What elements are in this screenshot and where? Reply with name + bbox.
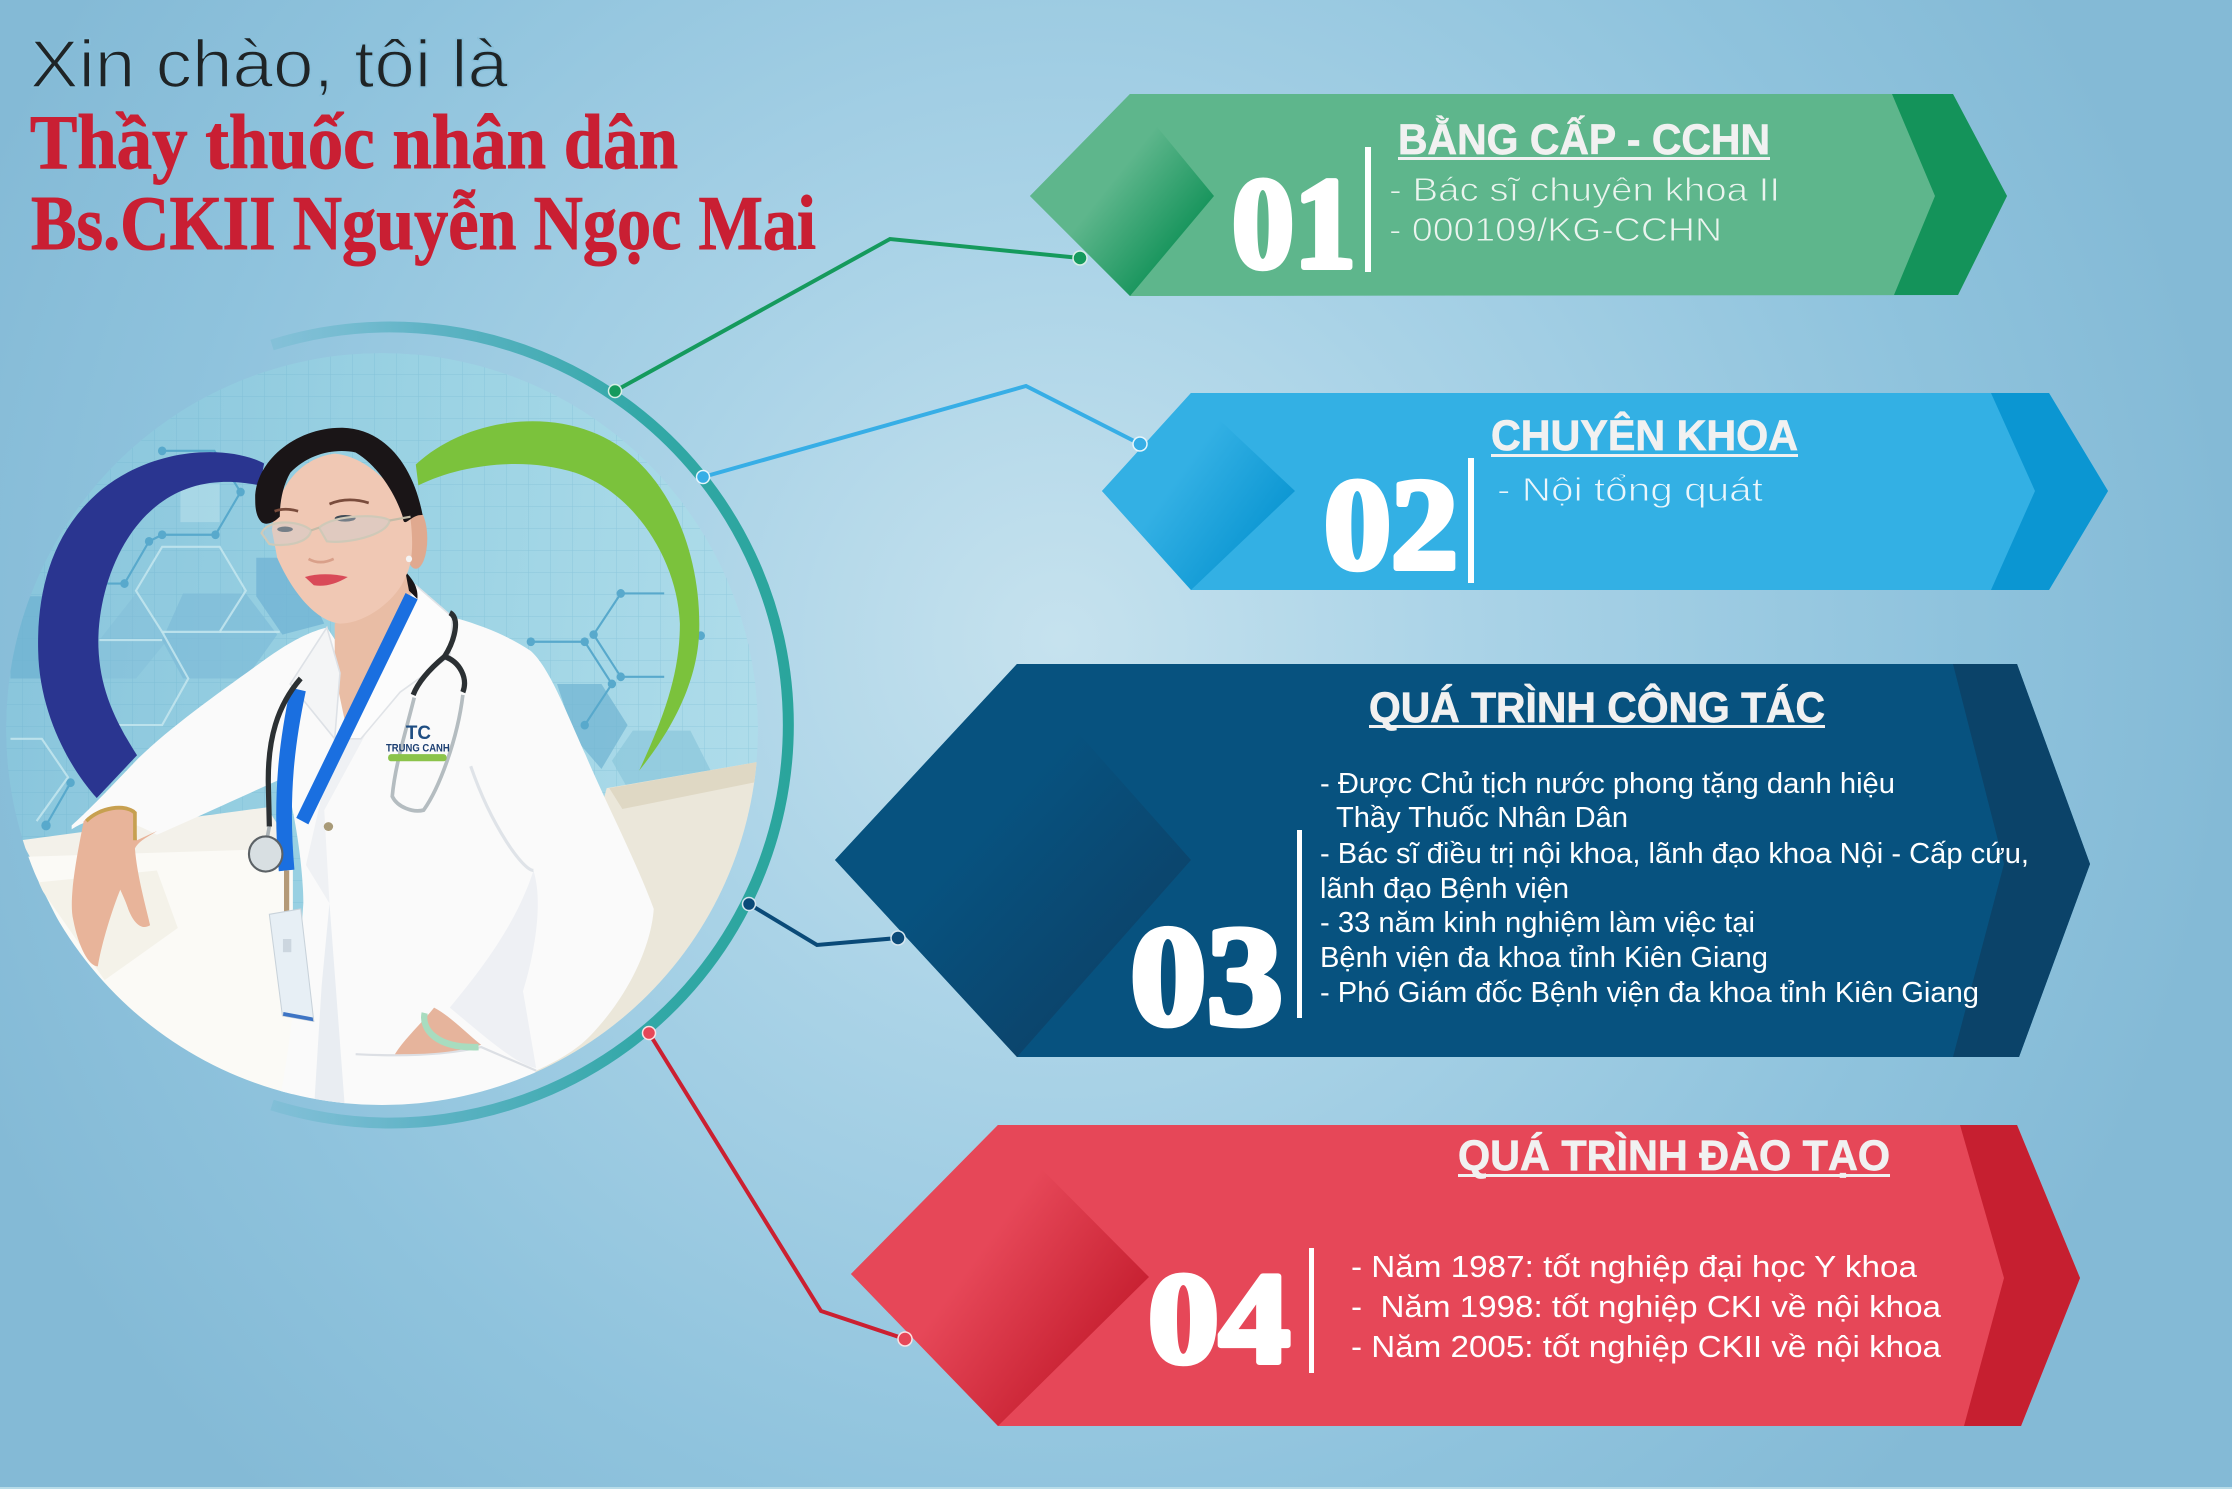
jade bracelet xyxy=(424,1013,479,1047)
body text: Thầy Thuốc Nhân Dân xyxy=(1336,802,1628,834)
divider xyxy=(1297,830,1302,1018)
neck xyxy=(335,574,416,722)
panel 02: chuyên khoa xyxy=(1102,393,2108,597)
lanyard xyxy=(302,596,412,821)
body text: - Nội tổng quát xyxy=(1497,471,1763,508)
heading underline xyxy=(1398,157,1770,160)
divider xyxy=(1468,458,1474,583)
left fold xyxy=(835,664,1191,1057)
logo arc: green xyxy=(416,421,699,771)
body text: Bệnh viện đa khoa tỉnh Kiên Giang xyxy=(1320,942,1768,974)
right band xyxy=(1960,1125,2080,1426)
left fold xyxy=(1030,94,1214,296)
collars xyxy=(290,627,340,739)
logo arc: navy xyxy=(38,452,264,798)
right hand in pocket xyxy=(395,1008,481,1054)
arrow body xyxy=(835,664,2090,1057)
heading: QUÁ TRÌNH CÔNG TÁC xyxy=(1369,683,1825,732)
panel 03: quá trình công tác xyxy=(835,664,2090,1057)
left fold xyxy=(851,1125,1149,1426)
body text: - Phó Giám đốc Bệnh viện đa khoa tỉnh Kiên Giang xyxy=(1320,977,1979,1009)
right band xyxy=(1991,393,2108,590)
body text: - Bác sĩ chuyên khoa II xyxy=(1389,171,1780,208)
hair nape xyxy=(406,573,418,599)
left fold xyxy=(1102,393,1295,590)
coat logo: TC xyxy=(406,722,431,744)
panel 01: bằng cấp xyxy=(1030,94,2007,296)
heading underline xyxy=(1458,1174,1890,1177)
body text: - Năm 1987: tốt nghiệp đại học Y khoa xyxy=(1351,1249,1918,1284)
arrow body xyxy=(1030,94,2007,296)
gold bracelet xyxy=(86,808,135,840)
heading: QUÁ TRÌNH ĐÀO TẠO xyxy=(1458,1132,1890,1180)
divider xyxy=(1309,1248,1314,1373)
heading underline xyxy=(1491,454,1798,457)
right band xyxy=(1953,664,2090,1057)
facial features xyxy=(262,500,412,586)
arrow body xyxy=(1102,393,2108,590)
body text: lãnh đạo Bệnh viện xyxy=(1320,873,1569,905)
ID badge xyxy=(269,870,314,1021)
number: 04 xyxy=(1148,1247,1290,1391)
hexagon network xyxy=(10,446,711,830)
coat logo xyxy=(386,722,450,761)
body text: - 000109/KG-CCHN xyxy=(1389,211,1722,248)
white coat xyxy=(72,585,654,1112)
portrait circle xyxy=(0,350,770,1112)
heading xyxy=(30,27,816,266)
panel 04: quá trình đào tạo xyxy=(851,1125,2080,1426)
connector: navy xyxy=(742,898,905,945)
number: 01 xyxy=(1232,152,1356,296)
reception counter xyxy=(21,762,758,1112)
body text: - 33 năm kinh nghiệm làm việc tại xyxy=(1320,907,1755,939)
coat logo: TRUNG CANH xyxy=(386,742,450,754)
divider xyxy=(1365,147,1371,272)
heading: BẰNG CẤP - CCHN xyxy=(1398,116,1770,164)
doctor xyxy=(72,428,654,1112)
body text: - Được Chủ tịch nước phong tặng danh hiệu xyxy=(1320,768,1895,800)
left hand xyxy=(72,807,157,966)
body text: - Bác sĩ điều trị nội khoa, lãnh đạo khoa Nội - Cấp cứu, xyxy=(1320,838,2029,870)
hair xyxy=(255,428,423,524)
coat button xyxy=(324,822,333,831)
connector: blue xyxy=(696,386,1147,484)
title line: Thầy thuốc nhân dân xyxy=(30,99,678,185)
face xyxy=(272,454,412,624)
body text: - Năm 1998: tốt nghiệp CKI về nội khoa xyxy=(1351,1289,1942,1324)
greeting line: Xin chào, tôi là xyxy=(30,27,509,102)
body text: - Năm 2005: tốt nghiệp CKII về nội khoa xyxy=(1351,1329,1942,1364)
ear xyxy=(410,514,428,569)
connector: red xyxy=(642,1026,912,1346)
ring arc xyxy=(272,327,788,1123)
heading underline xyxy=(1369,725,1825,728)
arrow body xyxy=(851,1125,2080,1426)
heading: CHUYÊN KHOA xyxy=(1491,411,1798,460)
right band xyxy=(1892,94,2007,295)
name line: Bs.CKII Nguyễn Ngọc Mai xyxy=(31,180,816,266)
connector: green xyxy=(608,239,1087,398)
number: 03 xyxy=(1130,897,1283,1055)
number: 02 xyxy=(1324,453,1458,597)
stethoscope xyxy=(249,613,464,872)
